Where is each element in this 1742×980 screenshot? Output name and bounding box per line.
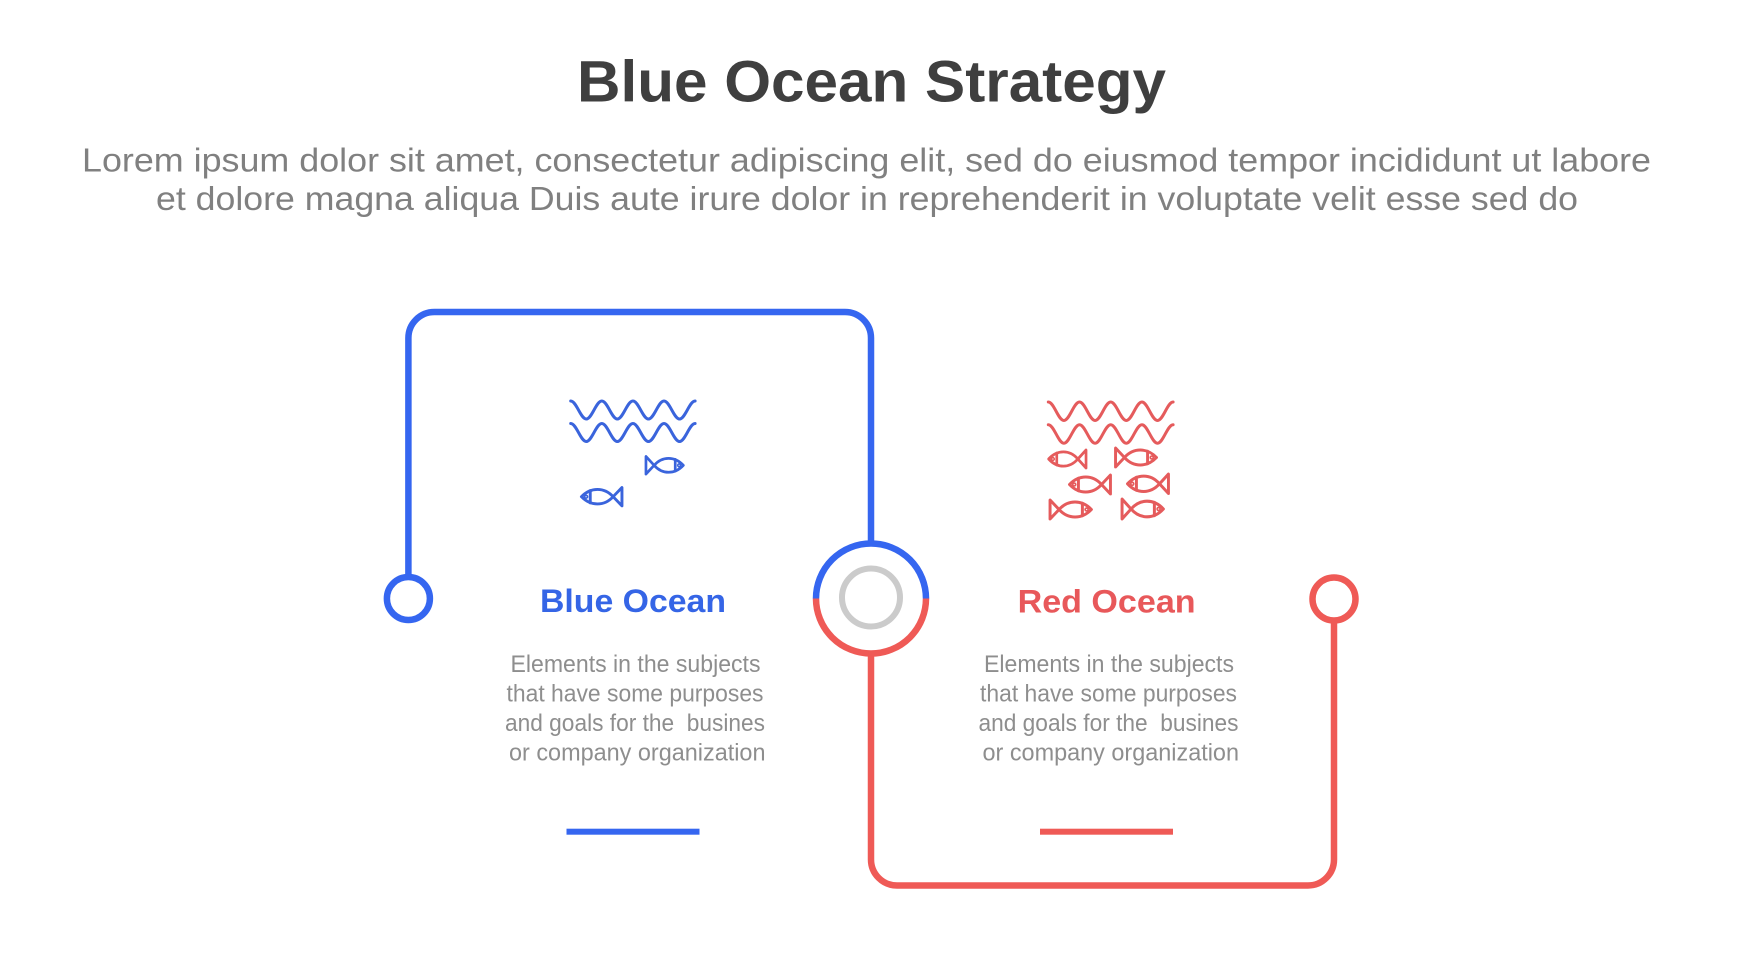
icon: blue waves and fish — [571, 401, 695, 506]
red end node — [1312, 578, 1356, 620]
body text: blue ocean: or company organization — [509, 740, 766, 767]
body text: blue ocean: that have some purposes — [506, 681, 764, 708]
subtitle — [82, 142, 1651, 217]
body text: blue ocean: Elements in the subjects — [510, 651, 760, 678]
body text: blue ocean — [505, 651, 766, 767]
subtitle: et dolore magna aliqua Duis aute irure dolor in reprehenderit in voluptate velit esse sed do — [156, 180, 1578, 217]
red connector frame — [871, 621, 1334, 886]
body text: red ocean: or company organization — [982, 740, 1239, 767]
body text: red ocean: Elements in the subjects — [984, 651, 1234, 678]
heading: red ocean: Red Ocean — [1018, 584, 1196, 620]
accent bar: blue — [566, 829, 700, 835]
blue end node — [387, 577, 430, 620]
body text: red ocean: that have some purposes — [980, 681, 1237, 708]
blue connector frame — [408, 312, 871, 577]
panel: blue ocean — [505, 401, 766, 835]
accent bar: red — [1040, 829, 1173, 835]
title: Blue Ocean Strategy — [577, 50, 1166, 115]
icon: red waves and fish — [1048, 402, 1173, 519]
heading: blue ocean: Blue Ocean — [540, 583, 726, 619]
body text: blue ocean: and goals for the busines — [505, 710, 765, 737]
subtitle: Lorem ipsum dolor sit amet, consectetur adipiscing elit, sed do eiusmod tempor incididunt ut labore — [82, 142, 1651, 179]
central junction node — [816, 544, 926, 654]
body text: red ocean — [978, 651, 1239, 767]
body text: red ocean: and goals for the busines — [978, 710, 1238, 737]
panel: red ocean — [978, 402, 1239, 835]
